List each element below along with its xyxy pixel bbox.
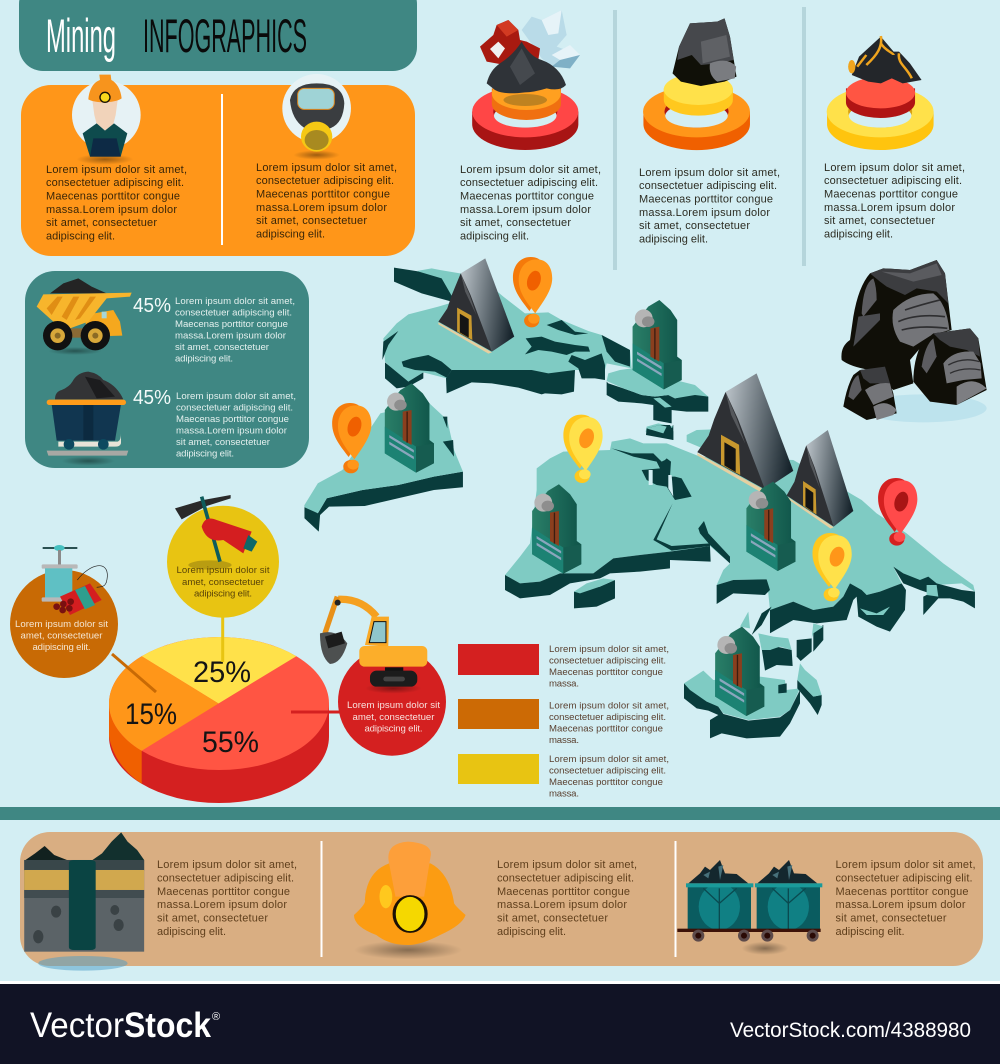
icon: gas mask: [282, 74, 351, 160]
divider: [613, 10, 617, 270]
text: cart: [176, 391, 296, 460]
text: mine carts: adipiscing elit.: [836, 926, 904, 938]
callout: orange circle: [10, 545, 118, 678]
ring text: gold ore: adipiscing elit.: [824, 228, 893, 240]
ring text: coal rock: massa.Lorem ipsum dolor: [639, 207, 770, 219]
text: helmet: Lorem ipsum dolor sit amet,: [497, 859, 637, 871]
text: truck: Maecenas porttitor congue: [175, 319, 288, 330]
text: mine shaft: sit amet, consectetuer: [157, 912, 268, 924]
ring text: crystals: Maecenas porttitor congue: [460, 190, 594, 202]
connector: yellow: [221, 613, 224, 662]
text: helmet: sit amet, consectetuer: [497, 912, 608, 924]
title banner: INFOGRAPHICS: [143, 9, 307, 62]
ring text: gold ore: Maecenas porttitor congue: [824, 188, 958, 200]
callout text: Lorem ipsum dolor sit: [347, 700, 440, 711]
text: mine shaft: consectetuer adipiscing elit.: [157, 872, 294, 884]
text: mine carts: Lorem ipsum dolor sit amet,: [836, 859, 976, 871]
legend: red: [458, 644, 669, 690]
text: cart: Maecenas porttitor congue: [176, 414, 289, 425]
ring text: coal rock: sit amet, consectetuer: [639, 220, 750, 232]
panel: bottom tan: [20, 832, 983, 971]
text: miner: [46, 164, 187, 242]
icon: plunger and dynamite: [42, 545, 107, 615]
ring text: gold ore: Lorem ipsum dolor sit amet,: [824, 162, 965, 174]
divider: [802, 7, 806, 266]
text: truck: [175, 296, 295, 364]
text: mine shaft: Maecenas porttitor congue: [157, 886, 290, 898]
text: helmet: consectetuer adipiscing elit.: [497, 872, 634, 884]
title banner: [19, 0, 417, 71]
teal band: [0, 807, 1000, 820]
slice: 15% orange: [109, 656, 218, 751]
legend: yellow: [458, 754, 669, 800]
text: miner: sit amet, consectetuer: [46, 217, 157, 229]
ring text: crystals: adipiscing elit.: [460, 230, 529, 242]
label: 55%: 55%: [202, 726, 259, 759]
slice: 55% red: [109, 637, 329, 770]
ring text: coal rock: [639, 167, 780, 246]
ring text: crystals: consectetuer adipiscing elit.: [460, 177, 598, 189]
callout text: adipiscing elit.: [194, 588, 252, 600]
pin: orange: [513, 257, 552, 327]
pin: yellow: [812, 533, 852, 601]
panel: vehicles: [25, 271, 309, 468]
callout text: Lorem ipsum dolor sit: [176, 565, 270, 576]
legend: yellow: consectetuer adipiscing elit.: [549, 766, 666, 776]
text: helmet: Maecenas porttitor congue: [497, 886, 630, 898]
text: mine carts: sit amet, consectetuer: [836, 912, 947, 924]
footer bar: [0, 984, 1000, 1064]
footer id: VectorStock.com/4388980: [730, 1019, 971, 1042]
text: mine carts: Maecenas porttitor congue: [836, 886, 968, 898]
callout: red circle: [320, 597, 446, 756]
text: truck: Lorem ipsum dolor sit amet,: [175, 296, 295, 307]
pin: red: [878, 478, 917, 546]
ring text: gold ore: massa.Lorem ipsum dolor: [824, 202, 955, 214]
ring text: coal rock: Lorem ipsum dolor sit amet,: [639, 167, 780, 179]
ring text: gold ore: [824, 162, 965, 240]
text: mine carts: consectetuer adipiscing elit.: [836, 872, 972, 884]
pie chart: [109, 637, 329, 803]
north america: [382, 268, 632, 394]
factory: [746, 482, 796, 571]
logo: VectorStock: VectorStock: [30, 1006, 211, 1045]
text: mine shaft: adipiscing elit.: [157, 926, 226, 938]
icon: dump truck: [37, 278, 132, 355]
factory: [532, 484, 581, 574]
callout: yellow circle: [167, 495, 279, 618]
text: gas mask: adipiscing elit.: [256, 228, 325, 240]
callout text: adipiscing elit.: [364, 724, 422, 734]
white strip: [0, 981, 1000, 984]
legend: orange: Lorem ipsum dolor sit amet,: [549, 700, 669, 712]
callout text: [15, 619, 108, 653]
text: miner: massa.Lorem ipsum dolor: [46, 204, 177, 216]
connector: orange: [112, 654, 156, 692]
legend: orange: [458, 699, 669, 746]
central island: [607, 368, 708, 440]
australia and islands: [684, 607, 823, 738]
south america: [304, 403, 463, 532]
eurasia and africa: [505, 425, 975, 633]
icon: coal cart: [47, 372, 128, 466]
ring text: crystals: Lorem ipsum dolor sit amet,: [460, 164, 601, 176]
text: gas mask: [256, 162, 397, 240]
text: mine carts: massa.Lorem ipsum dolor: [836, 899, 966, 911]
callout text: amet, consectetuer: [182, 577, 265, 588]
text: helmet: [497, 859, 637, 938]
text: truck: massa.Lorem ipsum dolor: [175, 330, 287, 342]
icon: miner: [72, 75, 141, 165]
legend: orange: consectetuer adipiscing elit.: [549, 712, 666, 723]
ring text: gold ore: consectetuer adipiscing elit.: [824, 175, 962, 187]
text: cart: massa.Lorem ipsum dolor: [176, 426, 288, 436]
factory: [385, 383, 434, 473]
text: gas mask: massa.Lorem ipsum dolor: [256, 202, 387, 214]
icon: helmet: [354, 842, 466, 959]
ring text: crystals: [460, 164, 601, 242]
ring text: gold ore: sit amet, consectetuer: [824, 215, 935, 227]
title: Mining: Mining: [46, 9, 116, 62]
text: miner: adipiscing elit.: [46, 230, 115, 242]
text: cart: consectetuer adipiscing elit.: [176, 402, 293, 414]
text: mine shaft: Lorem ipsum dolor sit amet,: [157, 859, 297, 871]
callout text: [347, 700, 440, 734]
legend: red: consectetuer adipiscing elit.: [549, 656, 666, 666]
factory: [715, 627, 764, 716]
pie side: [109, 704, 329, 803]
legend: orange: massa.: [549, 735, 579, 746]
ring text: crystals: sit amet, consectetuer: [460, 217, 571, 229]
ring text: coal rock: consectetuer adipiscing elit.: [639, 180, 777, 192]
legend: red: Lorem ipsum dolor sit amet,: [549, 644, 669, 655]
icon: mine shaft: [24, 832, 144, 971]
label: 15%: 15%: [125, 698, 177, 731]
text: gas mask: Maecenas porttitor congue: [256, 188, 390, 200]
ring icon: gold ore: [827, 36, 934, 150]
text: gas mask: Lorem ipsum dolor sit amet,: [256, 162, 397, 174]
stat: cart 45%: 45%: [133, 387, 171, 409]
legend: red: massa.: [549, 678, 579, 690]
text: helmet: massa.Lorem ipsum dolor: [497, 899, 627, 911]
ring text: coal rock: adipiscing elit.: [639, 234, 708, 246]
legend: yellow: Lorem ipsum dolor sit amet,: [549, 754, 669, 765]
mine mountain: [787, 430, 853, 529]
text: cart: adipiscing elit.: [176, 448, 234, 460]
stat: truck 45%: 45%: [133, 295, 171, 317]
text: truck: sit amet, consectetuer: [175, 342, 270, 353]
text: truck: consectetuer adipiscing elit.: [175, 308, 292, 318]
icon: pickaxe and glove: [175, 495, 257, 570]
callout text: Lorem ipsum dolor sit: [15, 619, 108, 630]
ring icon: crystals and coal: [472, 10, 580, 150]
text: cart: sit amet, consectetuer: [176, 437, 271, 448]
legend: yellow: Maecenas porttitor congue: [549, 777, 663, 788]
slice: 25% yellow: [142, 637, 296, 704]
pin: yellow: [563, 415, 603, 483]
callout text: amet, consectetuer: [352, 712, 435, 723]
icon: excavator: [320, 597, 427, 694]
factory: [633, 300, 682, 389]
text: miner: consectetuer adipiscing elit.: [46, 177, 184, 189]
text: mine carts: [836, 859, 976, 938]
text: gas mask: sit amet, consectetuer: [256, 215, 367, 227]
label: 25%: 25%: [193, 656, 251, 689]
world map: [304, 257, 987, 738]
text: helmet: adipiscing elit.: [497, 926, 566, 938]
text: truck: adipiscing elit.: [175, 354, 233, 364]
ring icon: coal rock: [643, 18, 750, 150]
icon: coal pile: [841, 260, 987, 422]
ring text: crystals: massa.Lorem ipsum dolor: [460, 204, 591, 216]
legend: yellow: massa.: [549, 788, 579, 800]
connector: red: [291, 710, 345, 714]
callout text: [176, 565, 270, 600]
text: miner: Maecenas porttitor congue: [46, 190, 180, 202]
text: mine shaft: massa.Lorem ipsum dolor: [157, 899, 287, 911]
logo: registered mark: ®: [212, 1011, 220, 1023]
ring text: coal rock: Maecenas porttitor congue: [639, 194, 773, 206]
icon: mine carts: [677, 860, 822, 955]
text: miner: Lorem ipsum dolor sit amet,: [46, 164, 187, 176]
panel: orange people and equipment: [21, 74, 415, 256]
text: mine shaft: [157, 859, 297, 938]
legend: red: Maecenas porttitor congue: [549, 667, 663, 678]
legend: orange: Maecenas porttitor congue: [549, 724, 663, 734]
mine mountain: [438, 258, 514, 354]
text: gas mask: consectetuer adipiscing elit.: [256, 175, 394, 187]
pin: orange: [332, 403, 371, 473]
callout text: adipiscing elit.: [32, 642, 90, 653]
callout text: amet, consectetuer: [20, 630, 103, 642]
mine mountain: [697, 373, 793, 492]
text: cart: Lorem ipsum dolor sit amet,: [176, 391, 296, 402]
